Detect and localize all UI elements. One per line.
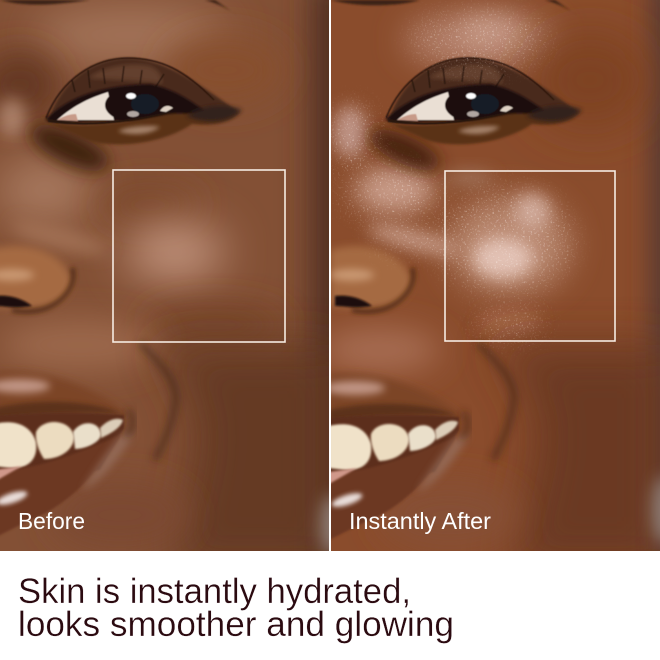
mouth: after [325, 373, 470, 540]
skin shading and glow: after [320, 0, 660, 570]
mouth: before [0, 371, 135, 538]
panel: after photo [320, 0, 660, 570]
eyebrow: before [2, 0, 228, 10]
eye: before [45, 58, 242, 144]
nose: after [330, 246, 413, 312]
eye: after [385, 58, 582, 144]
skin sparkle: after [331, 0, 586, 354]
label: instantly after: Instantly After [349, 508, 491, 534]
nose: before [0, 246, 73, 312]
label: before: Before [18, 508, 85, 534]
headline [18, 572, 454, 644]
skin shading: before [0, 0, 329, 551]
headline line 2: looks smoother and glowing [18, 605, 454, 644]
headline line 1: Skin is instantly hydrated, [18, 572, 411, 611]
comparison square: before [113, 170, 285, 342]
eyebrow: after [332, 0, 568, 10]
panel: before photo [0, 0, 329, 551]
comparison square: after [445, 171, 615, 341]
